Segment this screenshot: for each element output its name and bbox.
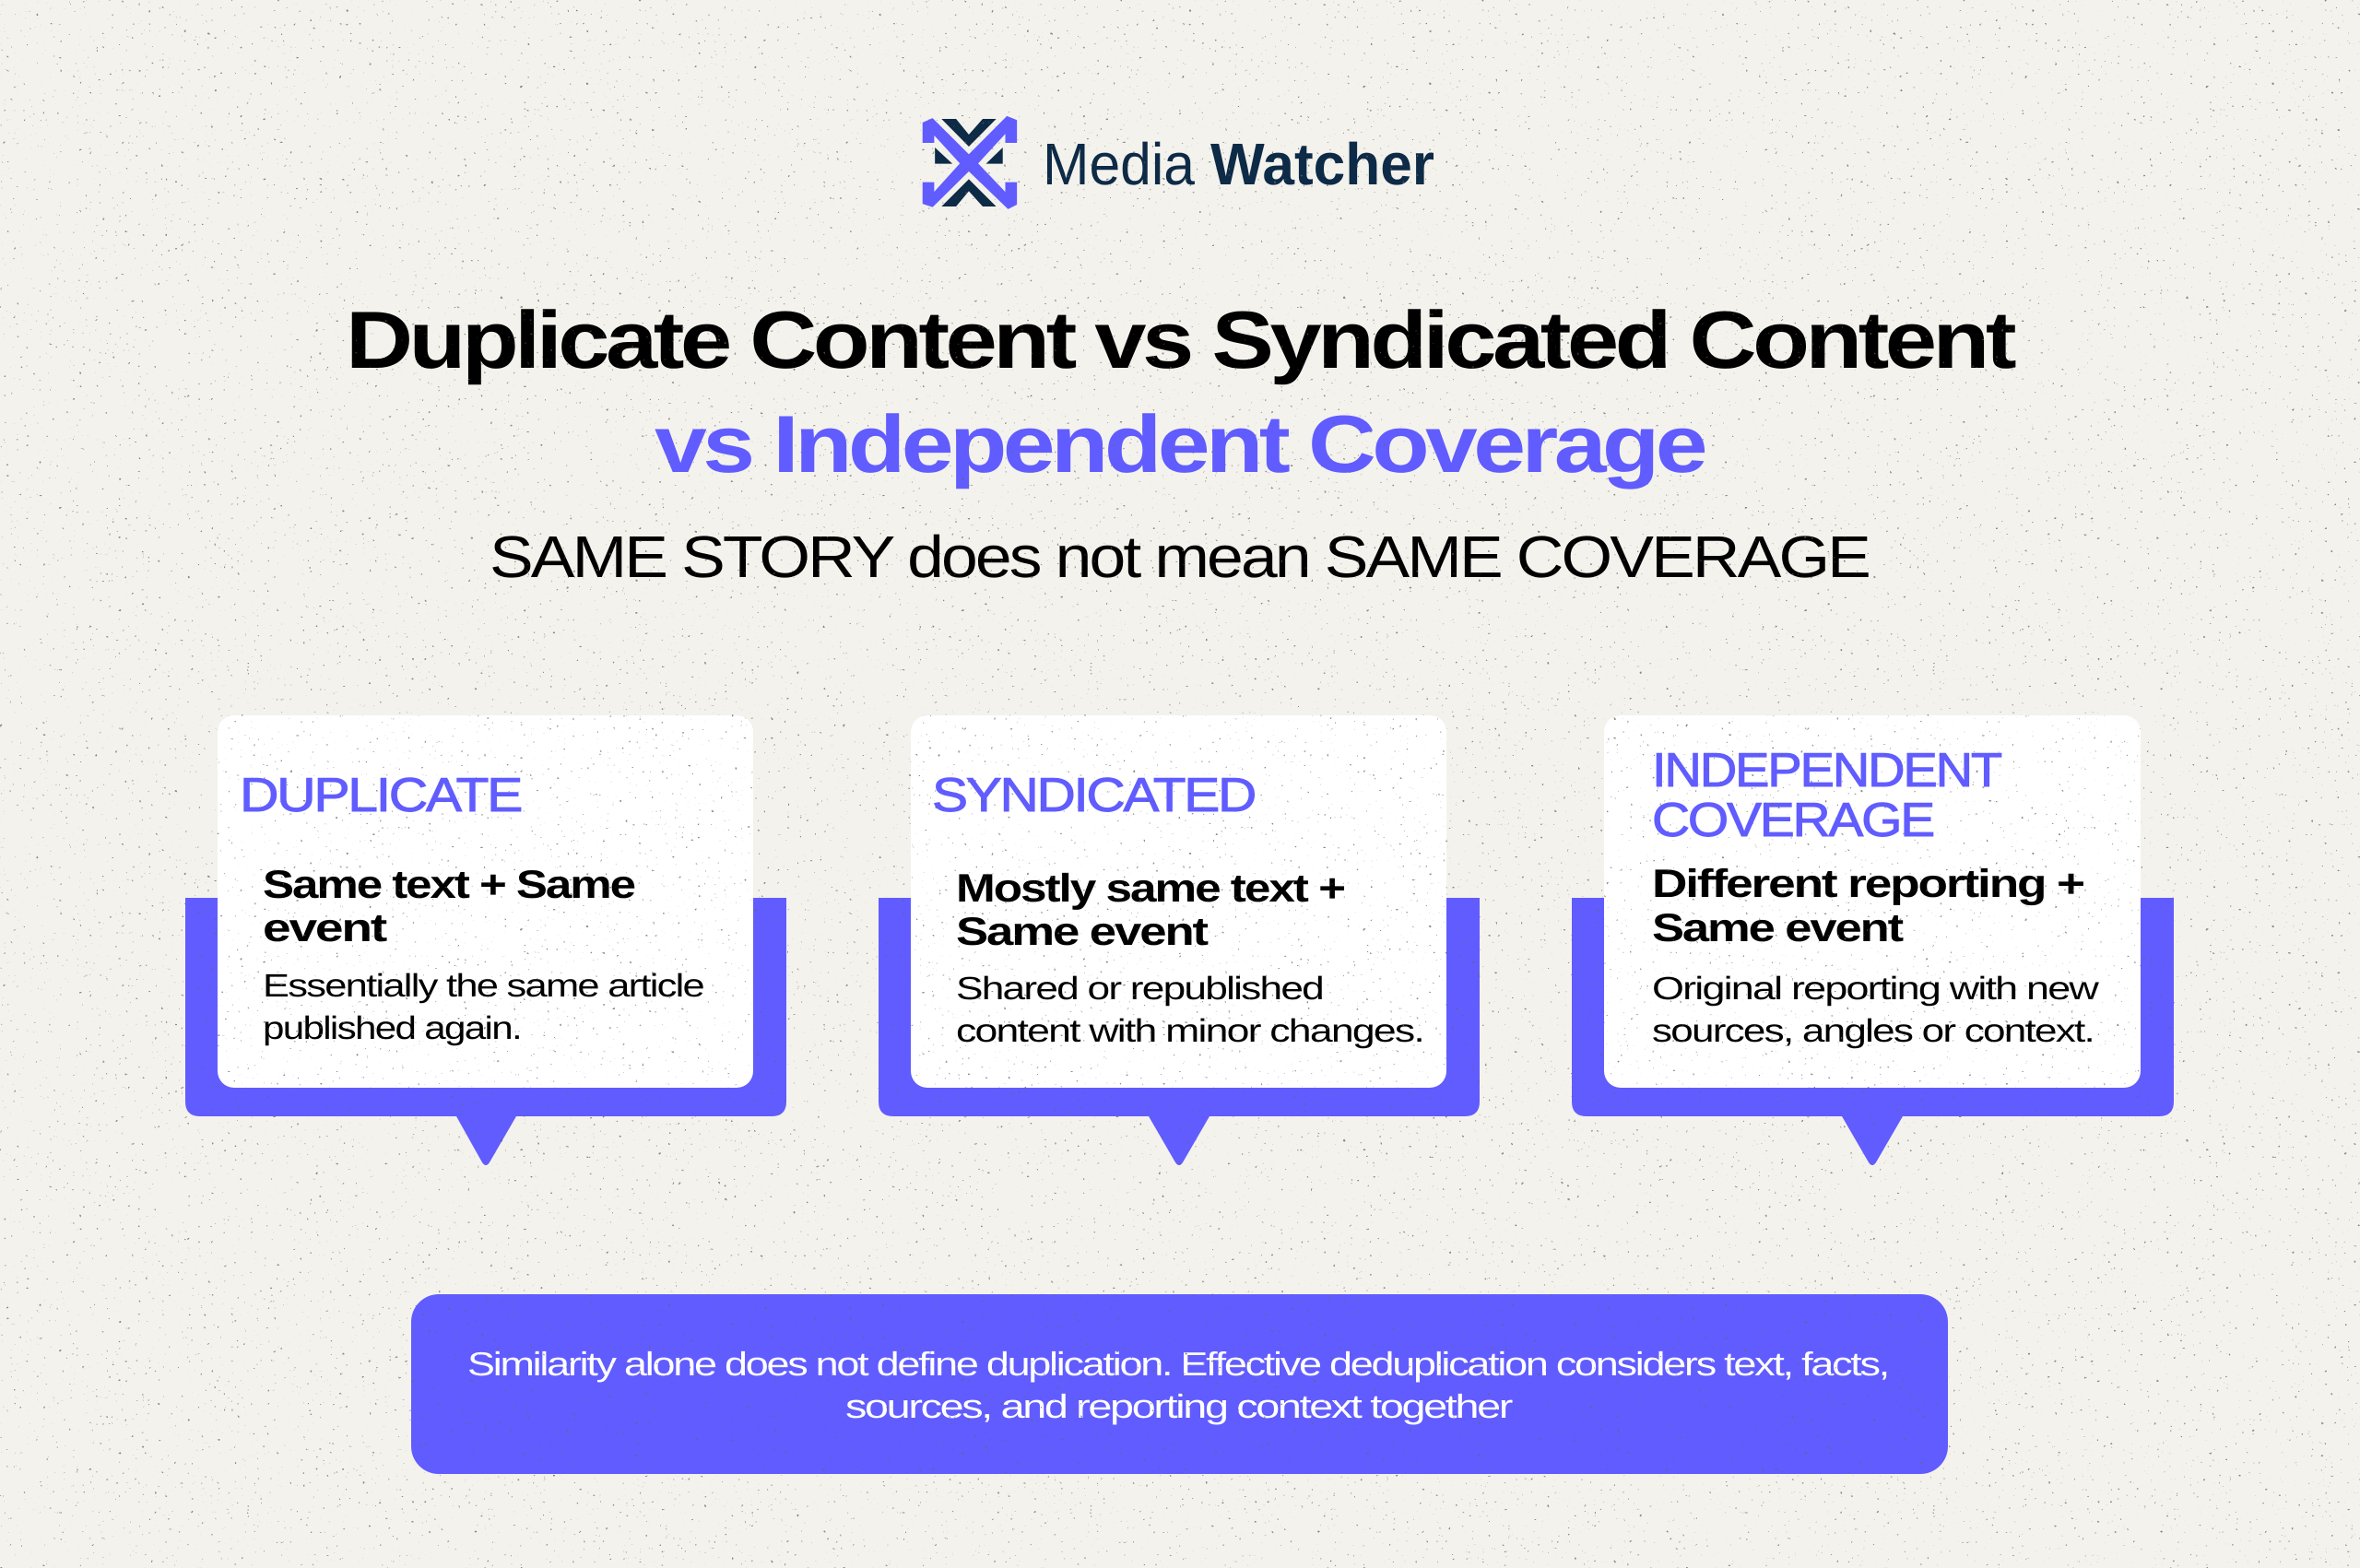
key phrase: Different reporting + <box>1652 862 2084 906</box>
heading: INDEPENDENT <box>1652 744 2001 797</box>
description <box>263 968 703 1046</box>
speech bubble backing <box>185 898 786 1165</box>
description: Original reporting with new <box>1652 971 2100 1007</box>
title: vs Independent Coverage <box>655 398 1705 489</box>
logo wordmark <box>1043 131 1434 197</box>
logo: Media Watcher <box>924 117 1434 208</box>
logo wordmark: Media <box>1043 131 1195 197</box>
card <box>911 715 1446 1088</box>
description: Essentially the same article <box>263 968 703 1004</box>
callout text <box>467 1345 1888 1425</box>
heading: SYNDICATED <box>932 769 1256 822</box>
callout banner <box>411 1294 1948 1474</box>
description: Shared or republished <box>956 971 1323 1007</box>
key phrase: event <box>263 906 387 950</box>
description <box>1652 971 2100 1049</box>
heading: COVERAGE <box>1652 794 1933 847</box>
panel: independent coverage <box>1572 715 2174 1165</box>
key phrase: Same event <box>1652 906 1904 950</box>
key phrase <box>263 863 635 950</box>
panel: syndicated <box>879 715 1480 1165</box>
card <box>1604 715 2141 1088</box>
logo wordmark: Watcher <box>1210 131 1434 197</box>
description: content with minor changes. <box>956 1013 1423 1049</box>
callout text: sources, and reporting context together <box>845 1387 1513 1425</box>
key phrase: Mostly same text + <box>956 867 1345 911</box>
description: published again. <box>263 1010 521 1046</box>
key phrase: Same event <box>956 910 1209 954</box>
callout text: Similarity alone does not define duplication. Effective deduplication considers text, facts, <box>467 1345 1888 1383</box>
key phrase <box>956 867 1345 954</box>
subtitle: SAME STORY does not mean SAME COVERAGE <box>490 524 1869 590</box>
speech bubble backing <box>879 898 1480 1165</box>
speech bubble backing <box>1572 898 2174 1165</box>
icon: crossing arrows mark <box>924 117 1016 208</box>
heading <box>1652 744 2001 847</box>
heading: DUPLICATE <box>240 769 521 822</box>
panel: duplicate <box>185 715 786 1165</box>
description <box>956 971 1423 1049</box>
description: sources, angles or context. <box>1652 1013 2094 1049</box>
key phrase: Same text + Same <box>263 863 635 907</box>
title <box>346 294 2016 489</box>
title: Duplicate Content vs Syndicated Content <box>346 294 2016 385</box>
card <box>218 715 753 1088</box>
key phrase <box>1652 862 2084 950</box>
